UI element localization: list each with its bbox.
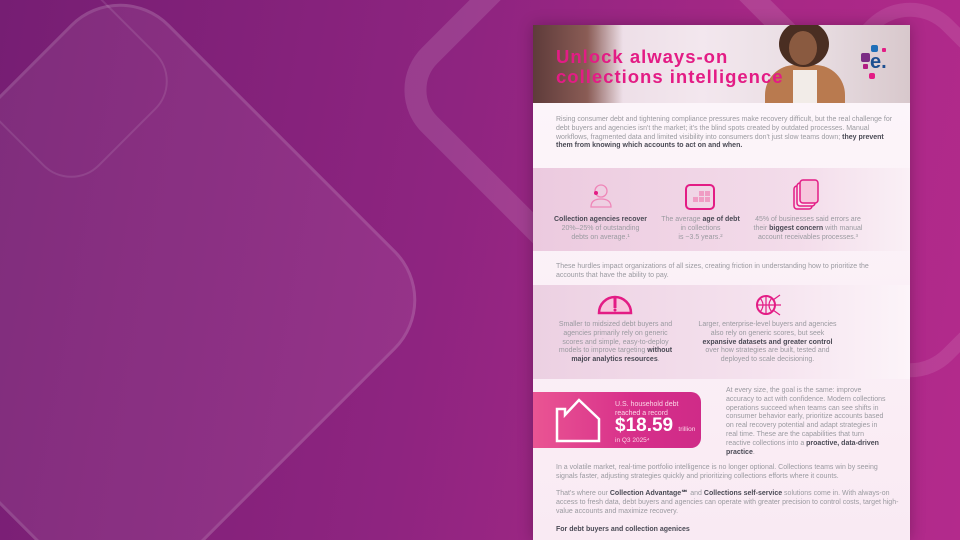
title: collections intelligence (556, 66, 784, 87)
stat 3: account receivables processes.³ (758, 234, 858, 241)
text: larger buyers: Larger, enterprise-level buyers and agencies also rely on generic scores, but seek expansive datasets and greater control over how strategies are built, tested and deployed to scale decisioning. (698, 321, 837, 363)
stat 1: Collection agencies recover (554, 216, 647, 223)
icon: headset person (590, 184, 612, 208)
stat box: household debt: U.S. household debt (615, 401, 678, 408)
stat 3: their biggest concern with manual (754, 225, 862, 232)
text: goal: At every size, the goal is the same: improve accuracy to act with confidence. Modern collections operations succeed when teams can see shifts in consumer behavior early, prioritize accounts based on real recovery potential and adapt strategies in real time. These are the capabilities that turn reactive collections into a proactive, data-driven practice. (726, 387, 886, 456)
stat 1: 20%–25% of outstanding (562, 225, 639, 232)
document (533, 25, 910, 540)
stat 1: debts on average.¹ (571, 234, 630, 241)
icon: globe network (756, 294, 781, 316)
stat box: household debt: in Q3 2025⁴ (615, 437, 650, 444)
stat box: household debt: $18.59 trillion (615, 415, 695, 436)
logo: e. (870, 51, 887, 73)
hurdles text: These hurdles impact organizations of all sizes, creating friction in understanding how to prioritize the accounts that have the ability to pay. (556, 263, 869, 279)
stat 3 (754, 216, 862, 241)
stat 2: The average age of debt (661, 216, 740, 223)
icon: documents (793, 179, 819, 210)
stat box: household debt: reached a record (615, 410, 668, 416)
stat 2: in collections (680, 225, 721, 232)
stat 2: is ~3.5 years.² (678, 234, 723, 241)
stat 2 (661, 216, 740, 241)
person right (765, 25, 845, 103)
text: volatile market: In a volatile market, real-time portfolio intelligence is no longer optional. Collections teams win by seeing signals faster, adjusting strategies quickly and prioritizing collections efforts where it counts. (556, 464, 878, 480)
subheading: For debt buyers and collection agenices (556, 526, 690, 533)
icon: house (556, 398, 600, 442)
logo (861, 45, 887, 79)
stat 1 (554, 216, 647, 241)
intro text: Rising consumer debt and tightening compliance pressures make recovery difficult, but the real challenge for debt buyers and agencies isn't the market; it's the blind spots created by outdated processes. Manual workflows, fragmented data and limited visibility into consumers don't just slow teams down; they prevent them from knowing which accounts to act on and when. (556, 116, 892, 149)
icon: calendar (685, 184, 715, 210)
band 2 (533, 285, 910, 379)
person left (533, 25, 623, 103)
text: solutions: That's where our Collection Advantage℠ and Collections self-service solutions come in. With always-on access to fresh data, debt buyers and agencies can operate with greater precision to control costs, target high-value accounts and maximize recovery. (556, 490, 898, 515)
stats band (533, 168, 910, 251)
text: smaller buyers: Smaller to midsized debt buyers and agencies primarily rely on generic scores and simple, easy-to-deploy models to improve targeting without major analytics resources. (559, 321, 672, 363)
stat box: household debt (533, 392, 701, 448)
title: Unlock always-on (556, 46, 728, 67)
title (556, 46, 784, 87)
icon: gauge (598, 296, 632, 314)
header image (533, 25, 910, 103)
stat 3: 45% of businesses said errors are (755, 216, 861, 223)
